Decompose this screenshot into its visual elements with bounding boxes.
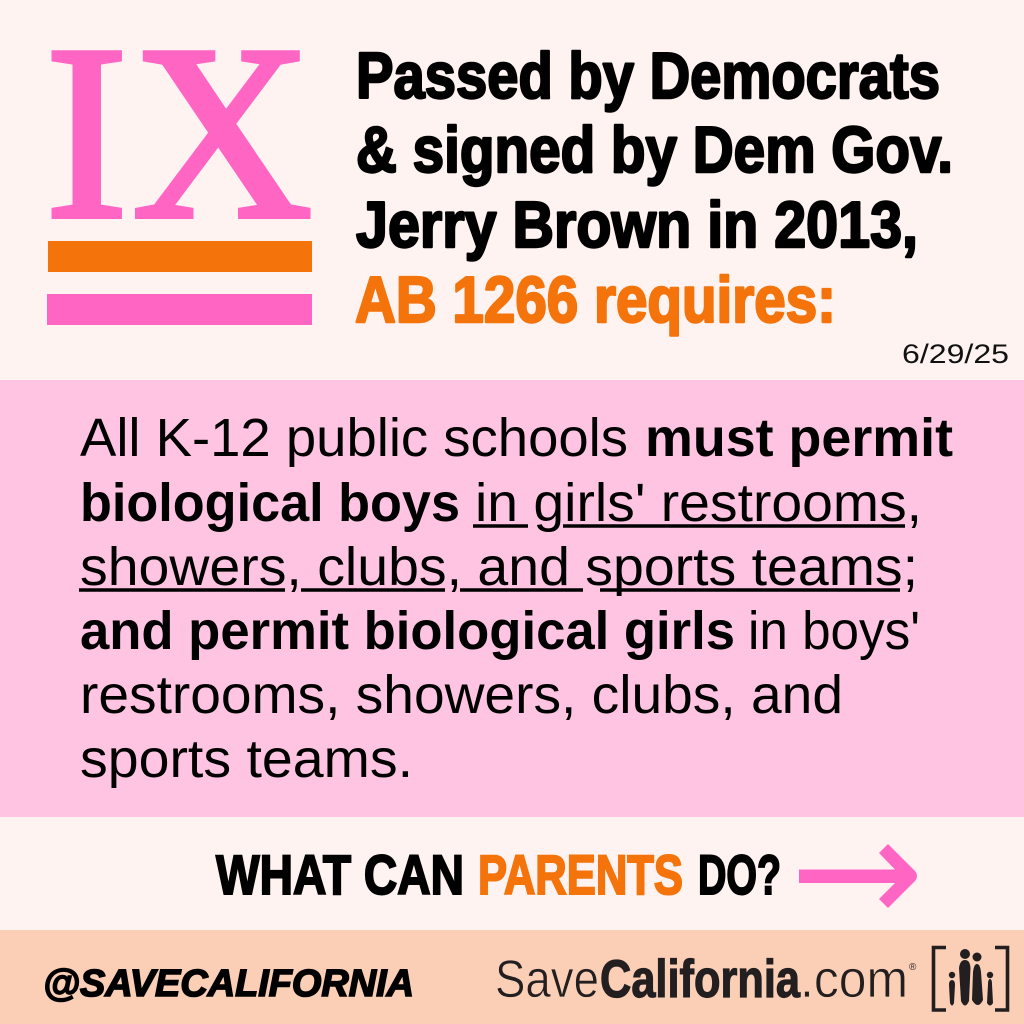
logo wordmark — [495, 950, 917, 1009]
icon: Title IX logo: I — [45, 0, 128, 272]
body text: requirements: showers, clubs, and sports teams; — [80, 537, 918, 597]
body text: requirements — [79, 408, 953, 789]
logo wordmark: .com — [800, 950, 908, 1009]
body text: requirements: must permit — [645, 408, 953, 468]
logo wordmark: California — [600, 950, 800, 1009]
icon: Title IX logo: X — [132, 0, 313, 272]
logo wordmark: Save — [495, 950, 599, 1009]
body text: requirements: restrooms, showers, clubs, and — [80, 665, 843, 725]
logo icon: family in brackets — [934, 948, 1008, 1010]
call to action: what can parents do: WHAT CAN — [216, 843, 464, 906]
heading: passed by Democrats, AB 1266 requires: & signed by Dem Gov. — [356, 113, 953, 186]
footer bar — [0, 930, 1024, 1024]
panel: AB 1266 requirements — [0, 380, 1024, 817]
call to action: what can parents do: DO? — [698, 843, 781, 906]
body text: requirements: in boys' — [748, 601, 920, 661]
body text: requirements: All K-12 public schools — [80, 408, 628, 468]
heading: passed by Democrats, AB 1266 requires: Passed by Democrats — [356, 39, 940, 112]
body text: requirements: in girls' restrooms, — [475, 473, 922, 533]
arrow — [799, 844, 917, 908]
heading: passed by Democrats, AB 1266 requires: Jerry Brown in 2013, — [356, 188, 918, 261]
icon: Title IX logo — [45, 0, 313, 325]
body text: requirements: biological boys — [80, 473, 460, 533]
social handle: @SAVECALIFORNIA — [43, 963, 414, 1005]
body text: requirements: and permit biological girls — [80, 601, 735, 661]
heading: passed by Democrats, AB 1266 requires — [355, 39, 953, 336]
body text: requirements: sports teams. — [80, 729, 413, 789]
logo wordmark: ® — [909, 962, 917, 973]
heading: passed by Democrats, AB 1266 requires: AB 1266 requires: — [355, 263, 836, 336]
call to action: what can parents do — [216, 843, 781, 906]
date stamp: 6/29/25 — [902, 339, 1009, 369]
call to action: what can parents do: PARENTS — [478, 843, 683, 906]
